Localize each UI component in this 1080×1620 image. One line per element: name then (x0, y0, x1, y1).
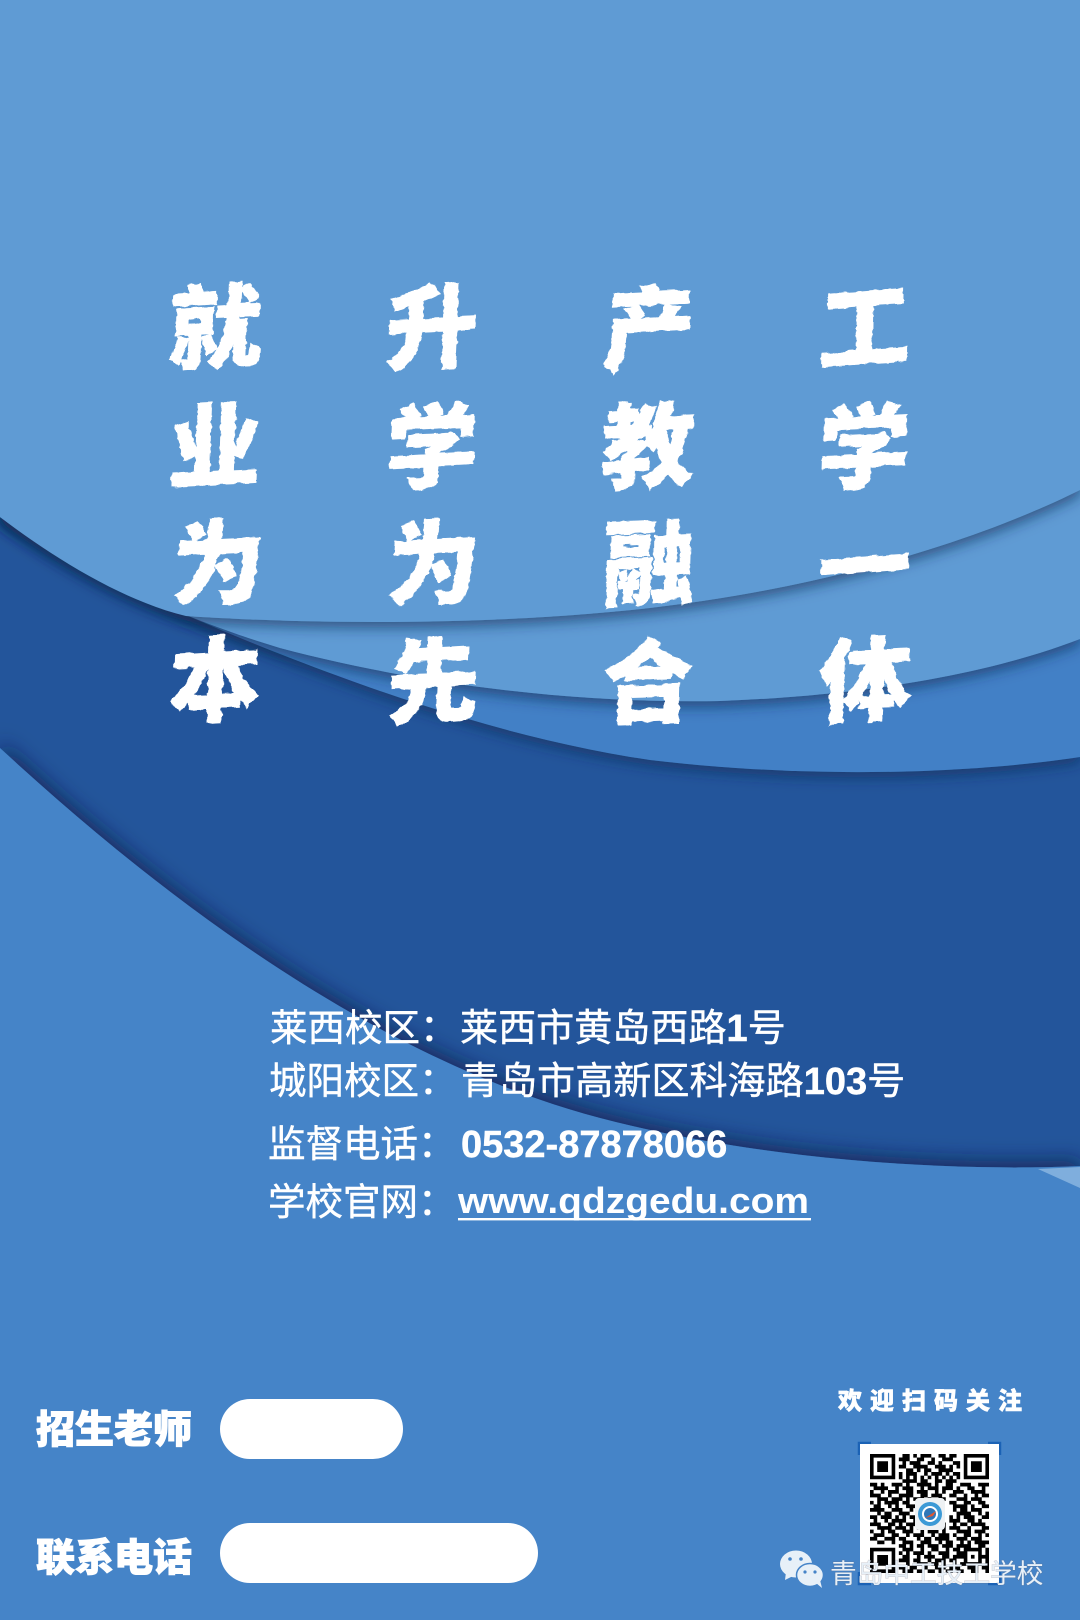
slogan column 3: 产教融合: 合 (601, 632, 695, 738)
wave: medium blue layer (0, 0, 1080, 772)
wave: lower light blue area (0, 748, 1080, 1620)
watermark: WeChat icon (780, 1550, 824, 1588)
school website (268, 1180, 811, 1223)
slogan column 1: 就业为本: 本 (167, 629, 263, 736)
wave: light blue top layer (0, 0, 1080, 622)
QR code (859, 1443, 1000, 1584)
slogan column 4: 工学一体: 学 (816, 396, 912, 503)
slogan column 2: 升学为先: 升 (384, 276, 480, 383)
admissions teacher label and blank pill (36, 1399, 403, 1459)
address: Laixi campus: 莱西校区： (270, 1007, 458, 1049)
address: Chengyang campus (269, 1060, 905, 1103)
QR modules (870, 1454, 989, 1573)
slogan column 2: 升学为先: 先 (385, 630, 481, 737)
contact phone label and blank pill (36, 1523, 538, 1583)
wave: light blue middle layer (0, 0, 1080, 701)
address: Chengyang campus: 城阳校区： (269, 1060, 456, 1102)
slogan column 2: 升学为先 (383, 276, 483, 737)
supervision phone: 0532-87878066 (461, 1124, 727, 1166)
scan prompt: 欢迎扫码关注 (838, 1388, 1030, 1415)
slogan column 4: 工学一体: 工 (817, 275, 912, 384)
contact information (268, 1007, 905, 1223)
address: Laixi campus: 莱西市黄岛西路1号 (460, 1007, 786, 1050)
address: Laixi campus (270, 1007, 786, 1050)
slogan column 3: 产教融合 (600, 277, 697, 738)
wave: small light sliver (1038, 1167, 1080, 1188)
school website: www.qdzgedu.com (457, 1180, 809, 1221)
slogan column 1: 就业为本: 为 (168, 511, 268, 619)
slogan column 3: 产教融合: 融 (601, 513, 697, 619)
supervision phone (268, 1123, 727, 1166)
QR center logo (915, 1498, 945, 1530)
school website: 学校官网： (268, 1181, 456, 1223)
supervision phone: 监督电话： (268, 1123, 456, 1165)
slogan column 3: 产教融合: 教 (600, 395, 696, 502)
slogan column 1: 就业为本: 就 (167, 276, 263, 383)
slogan column 1: 就业为本: 业 (167, 395, 263, 502)
slogan column 4: 工学一体: 体 (817, 629, 913, 736)
contact phone label and blank pill: 联系电话 (36, 1537, 192, 1580)
slogan column 1: 就业为本 (167, 276, 268, 736)
slogan: calligraphy characters (167, 275, 913, 738)
slogan column 3: 产教融合: 产 (601, 277, 697, 384)
watermark: school name: 青岛中工技工学校 (830, 1559, 1044, 1589)
slogan column 4: 工学一体 (816, 275, 913, 736)
slogan column 4: 工学一体: 一 (817, 514, 912, 623)
QR corner brackets (859, 1443, 1000, 1584)
slogan column 2: 升学为先: 学 (384, 396, 480, 503)
slogan column 2: 升学为先: 为 (383, 511, 483, 619)
address: Chengyang campus: 青岛市高新区科海路103号 (461, 1060, 905, 1103)
admissions teacher label and blank pill: 招生老师 (36, 1409, 192, 1452)
